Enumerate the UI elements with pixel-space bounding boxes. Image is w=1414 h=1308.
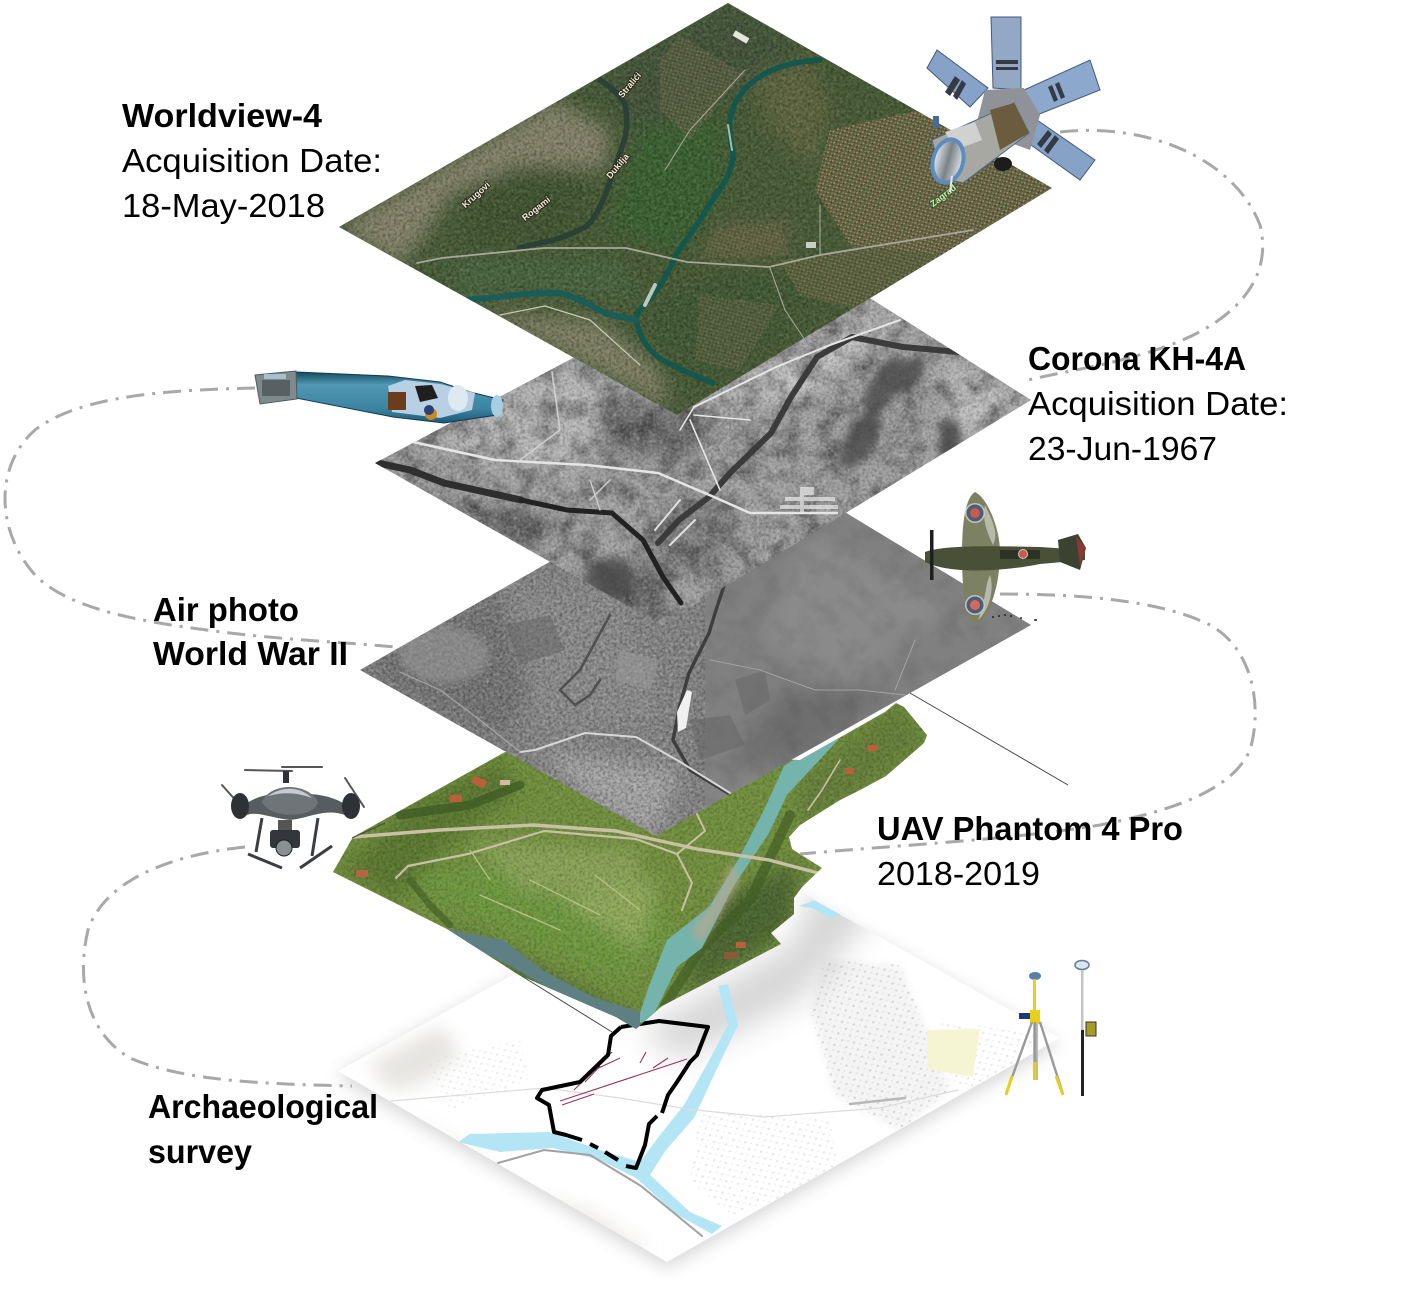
label: Corona KH-4A (1028, 340, 1288, 467)
label: Air photo World War II: World War II (153, 635, 348, 672)
icon: Worldview satellite (927, 17, 1100, 192)
Worldview place labels: Zagrad (928, 182, 958, 209)
map roads (391, 1088, 958, 1236)
map yellow field (927, 1029, 980, 1077)
layer: Corona KH-4A image (375, 298, 1031, 625)
thin leader line from the UAV layer (910, 693, 1068, 785)
Worldview place labels: Stralići (616, 70, 643, 100)
map purple survey lines (560, 1052, 687, 1105)
Worldview place labels: Dukilja (604, 151, 632, 181)
tripod head (1019, 1013, 1033, 1019)
shadow under the survey map (336, 860, 1060, 1268)
Worldview place labels: Rogami (520, 195, 552, 223)
aircraft propeller (930, 530, 934, 580)
air photo fields (505, 615, 770, 760)
label: Air photo World War II: Air photo (153, 591, 299, 628)
label: Corona KH-4A: 23-Jun-1967 (1028, 430, 1217, 467)
icon: Corona capsule (255, 371, 503, 423)
Corona dark blotches (586, 351, 960, 602)
tripod antenna (1029, 972, 1041, 980)
satellite hub (975, 88, 1040, 150)
label: UAV Phantom 4 Pro: 2018-2019 (877, 855, 1040, 892)
label: Archaeological survey (148, 1088, 378, 1170)
label: UAV Phantom 4 Pro (877, 810, 1183, 892)
label: Archaeological survey: Archaeological (148, 1088, 378, 1125)
label: Worldview-4: Acquisition Date: (122, 142, 382, 179)
label: Archaeological survey: survey (148, 1133, 253, 1170)
label: Worldview-4: Worldview-4 (122, 97, 323, 134)
aircraft debris marks (992, 615, 1037, 620)
capsule tail (255, 371, 297, 404)
icon: Spitfire aircraft (925, 492, 1086, 624)
aircraft tail (1058, 534, 1086, 570)
aircraft fuselage (925, 546, 1085, 570)
Worldview tonal patches (339, 3, 830, 410)
Worldview white buildings (733, 30, 749, 44)
aircraft wings (962, 492, 1000, 624)
dash-dot path: Corona to air photo (5, 388, 396, 647)
rover controller (1086, 1022, 1096, 1036)
map black study-area outline (537, 1021, 708, 1168)
rover antenna (1075, 960, 1089, 970)
icon: GNSS rover pole (1075, 960, 1096, 1096)
map hill shading (368, 1025, 650, 1255)
aircraft roundels (965, 503, 1028, 615)
drone propellers (222, 767, 364, 807)
capsule cutaway (388, 380, 475, 418)
drone body (262, 787, 318, 815)
map building clusters (810, 960, 950, 1130)
Corona white roads (413, 320, 900, 513)
UAV orange roofs (356, 745, 878, 959)
UAV roads (353, 760, 840, 930)
UAV river (447, 734, 838, 1030)
Worldview place labels (460, 70, 958, 223)
satellite panel strips (945, 60, 1065, 154)
UAV tonal patches (340, 700, 925, 1035)
tripod pole (1033, 979, 1036, 1015)
Worldview village area (660, 35, 1052, 370)
layer: UAV orthophoto (330, 690, 940, 1035)
dash-dot path: air photo to UAV (800, 594, 1255, 854)
label: Worldview-4 (122, 97, 382, 224)
rover pole (1081, 970, 1084, 1030)
map shadow from the UAV layer (640, 880, 880, 1060)
Worldview roads (417, 70, 973, 365)
layer: archaeological survey map (339, 893, 1057, 1262)
air photo white sandbar (677, 690, 692, 732)
label: Worldview-4: 18-May-2018 (122, 187, 325, 224)
UAV tree strip (400, 770, 805, 1005)
air photo rivers and roads (400, 583, 915, 793)
air photo mottled circle (400, 627, 490, 683)
Worldview place labels: Krugovi (460, 180, 492, 210)
label: Air photo World War II (153, 591, 348, 672)
label: Corona KH-4A: Corona KH-4A (1028, 340, 1246, 377)
capsule body (296, 372, 503, 423)
air photo tonal patches (360, 510, 1030, 836)
layer: Worldview-4 image (335, 0, 1055, 420)
Corona white town (780, 487, 838, 513)
dash-dot path: Worldview to Corona (1028, 130, 1263, 380)
drone legs (248, 818, 332, 868)
drone arms (240, 794, 350, 820)
Corona river (378, 337, 959, 603)
satellite wheel (994, 157, 1012, 171)
satellite front cylinder (928, 136, 968, 186)
thin leader line to the map (520, 975, 612, 1032)
drone camera (270, 830, 300, 848)
dash-dot path: UAV to survey (83, 847, 352, 1086)
thin leader line near the drone (352, 823, 385, 838)
satellite panels (927, 17, 1100, 180)
label: UAV Phantom 4 Pro: UAV Phantom 4 Pro (877, 810, 1183, 847)
icon: DJI Phantom drone (222, 767, 364, 868)
Worldview rivers (468, 60, 820, 383)
label: Corona KH-4A: Acquisition Date: (1028, 385, 1288, 422)
Corona tonal patches (430, 320, 1020, 620)
icon: GNSS tripod (1006, 972, 1063, 1095)
map rivers (458, 900, 842, 1234)
drone motors (231, 793, 249, 819)
satellite body (932, 103, 1029, 183)
layer: WWII air photo (360, 512, 1031, 836)
tripod legs (1006, 1022, 1063, 1094)
